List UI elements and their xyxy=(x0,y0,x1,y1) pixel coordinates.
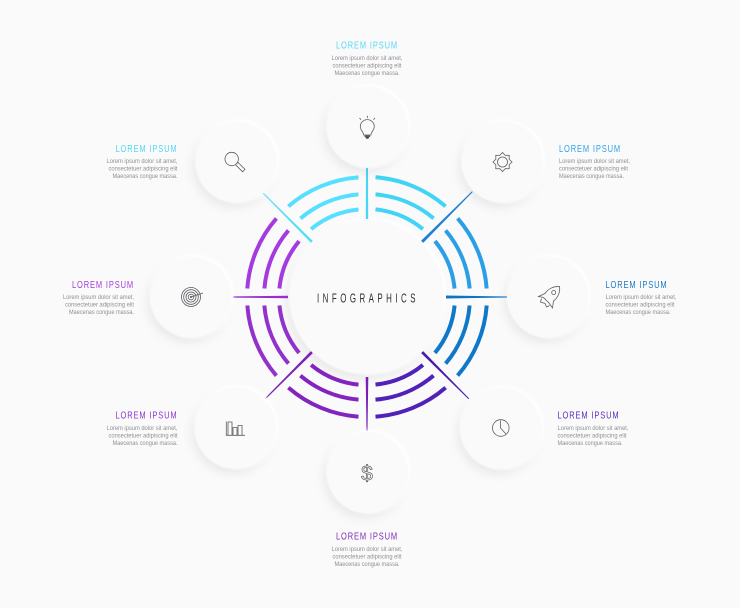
panel: top item xyxy=(327,40,408,168)
panel: left item xyxy=(63,256,232,338)
arcs: sector right lower xyxy=(435,306,487,376)
icon: target xyxy=(182,288,203,306)
circle xyxy=(195,388,276,468)
panel: bottom right item xyxy=(460,388,629,469)
panel: bottom item xyxy=(327,432,408,568)
text block xyxy=(106,158,178,180)
panel: top left item xyxy=(106,122,277,202)
text block: Lorem ipsum dolor sit amet, xyxy=(606,294,677,301)
heading: LOREM IPSUM xyxy=(558,410,620,422)
icon: rocket xyxy=(538,286,560,308)
text block: Maecenas congue massa. xyxy=(558,440,623,447)
text block: consectetuer adipiscing elit xyxy=(332,62,402,70)
icon: magnifier xyxy=(225,152,245,172)
heading: LOREM IPSUM xyxy=(72,279,134,291)
icon: bar chart xyxy=(226,422,245,435)
heading: LOREM IPSUM xyxy=(116,143,178,155)
panel: top right item xyxy=(462,122,630,202)
arcs: sector right upper xyxy=(421,218,507,305)
ring of arc segments xyxy=(227,157,507,437)
circle xyxy=(460,388,542,469)
text block: consectetuer adipiscing elit xyxy=(606,302,675,308)
arcs: sector left upper xyxy=(247,218,299,288)
center circle xyxy=(290,220,444,374)
circle xyxy=(462,122,543,202)
circle xyxy=(327,432,408,513)
text block: consectetuer adipiscing elit xyxy=(108,432,178,440)
panel: right item xyxy=(508,256,677,338)
icon: dollar sign: $ xyxy=(361,462,373,486)
arcs: sector bottom right xyxy=(359,351,446,437)
circle xyxy=(327,86,408,168)
text block: Lorem ipsum dolor sit amet, xyxy=(63,294,134,301)
text block: consectetuer adipiscing elit xyxy=(108,166,178,172)
text block: Maecenas congue massa. xyxy=(69,309,134,316)
circle xyxy=(196,122,277,202)
text block: Lorem ipsum dolor sit amet, xyxy=(559,158,630,165)
text block: consectetuer adipiscing elit xyxy=(332,554,402,560)
heading: LOREM IPSUM xyxy=(336,40,398,52)
text block xyxy=(332,55,403,77)
text block xyxy=(63,294,134,316)
arcs: sector bottom left xyxy=(288,365,358,417)
text block: Maecenas congue massa. xyxy=(606,309,671,316)
text block xyxy=(558,425,629,447)
text block: Lorem ipsum dolor sit amet, xyxy=(106,158,178,165)
arcs: sector top left xyxy=(288,157,375,243)
heading: LOREM IPSUM xyxy=(559,143,621,155)
arcs: sector left lower xyxy=(227,289,313,376)
center title: INFOGRAPHICS xyxy=(317,292,419,306)
text block: Maecenas congue massa. xyxy=(112,440,178,447)
text block: Maecenas congue massa. xyxy=(112,173,178,180)
text block xyxy=(332,546,403,568)
arcs: sector top right xyxy=(376,177,446,229)
heading: LOREM IPSUM xyxy=(606,279,668,291)
heading: LOREM IPSUM xyxy=(116,410,178,422)
radial divider lines xyxy=(233,168,507,431)
text block xyxy=(559,158,630,180)
text block: Maecenas congue massa. xyxy=(334,561,400,568)
text block: consectetuer adipiscing elit xyxy=(558,432,627,440)
text block: consectetuer adipiscing elit xyxy=(559,166,628,172)
text block xyxy=(106,425,178,447)
circle xyxy=(150,256,232,338)
text block: Maecenas congue massa. xyxy=(334,70,400,77)
text block xyxy=(606,294,677,316)
text block: Maecenas congue massa. xyxy=(559,173,624,180)
circle xyxy=(508,256,588,338)
text block: Lorem ipsum dolor sit amet, xyxy=(558,425,629,432)
icon: clock xyxy=(492,420,509,436)
text block: consectetuer adipiscing elit xyxy=(65,302,134,308)
text block: Lorem ipsum dolor sit amet, xyxy=(332,546,403,553)
text block: Lorem ipsum dolor sit amet, xyxy=(106,425,178,432)
heading: LOREM IPSUM xyxy=(336,530,398,542)
text block: Lorem ipsum dolor sit amet, xyxy=(332,55,403,62)
panel: bottom left item xyxy=(106,388,276,468)
icon: light bulb xyxy=(360,116,375,139)
icon: gear xyxy=(493,152,512,172)
